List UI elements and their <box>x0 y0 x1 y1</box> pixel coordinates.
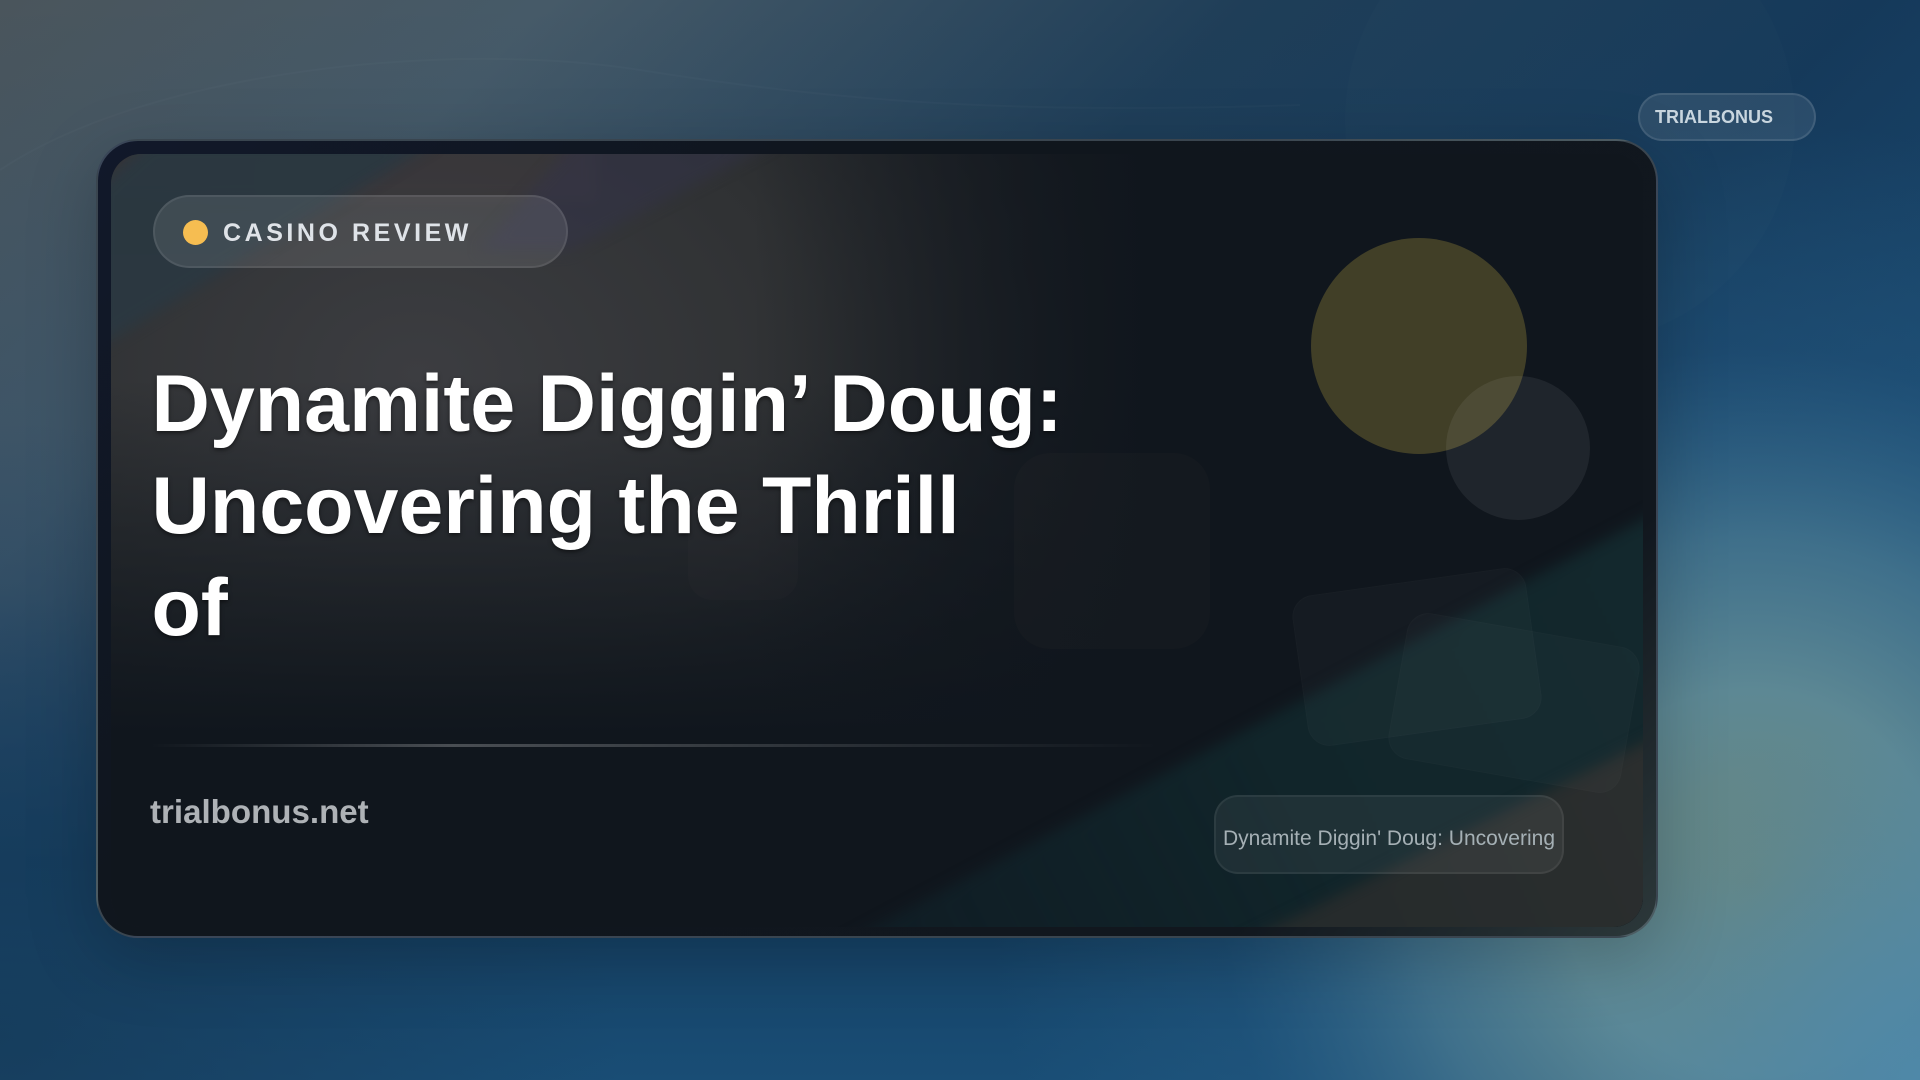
decorative tilted card: left <box>1290 565 1544 749</box>
subtitle tag <box>1214 795 1564 874</box>
decorative shape: faint square middle <box>826 550 974 698</box>
top-right brand pill <box>1638 93 1816 141</box>
panel: main card <box>96 139 1658 938</box>
title <box>152 359 1063 653</box>
badge label: CASINO REVIEW <box>223 219 472 247</box>
decorative shape: faint square small <box>688 490 798 600</box>
subtitle tag text: Dynamite Diggin' Doug: Uncovering <box>1223 827 1555 850</box>
title: Uncovering the Thrill <box>152 461 960 551</box>
title: of <box>152 563 228 653</box>
decorative circle: grey <box>1446 376 1590 520</box>
decorative tilted card: right <box>1385 610 1643 796</box>
site domain: trialbonus.net <box>150 794 369 831</box>
badge: casino review <box>153 195 568 268</box>
divider line <box>150 744 1160 747</box>
icon: gold dot <box>183 220 208 245</box>
decorative circle: gold <box>1311 238 1527 454</box>
brand pill text: TRIALBONUS <box>1655 107 1773 127</box>
title: Dynamite Diggin’ Doug: <box>152 359 1063 449</box>
card interior gradients <box>111 154 1643 927</box>
decorative shape: faint square centre right <box>1014 453 1210 649</box>
